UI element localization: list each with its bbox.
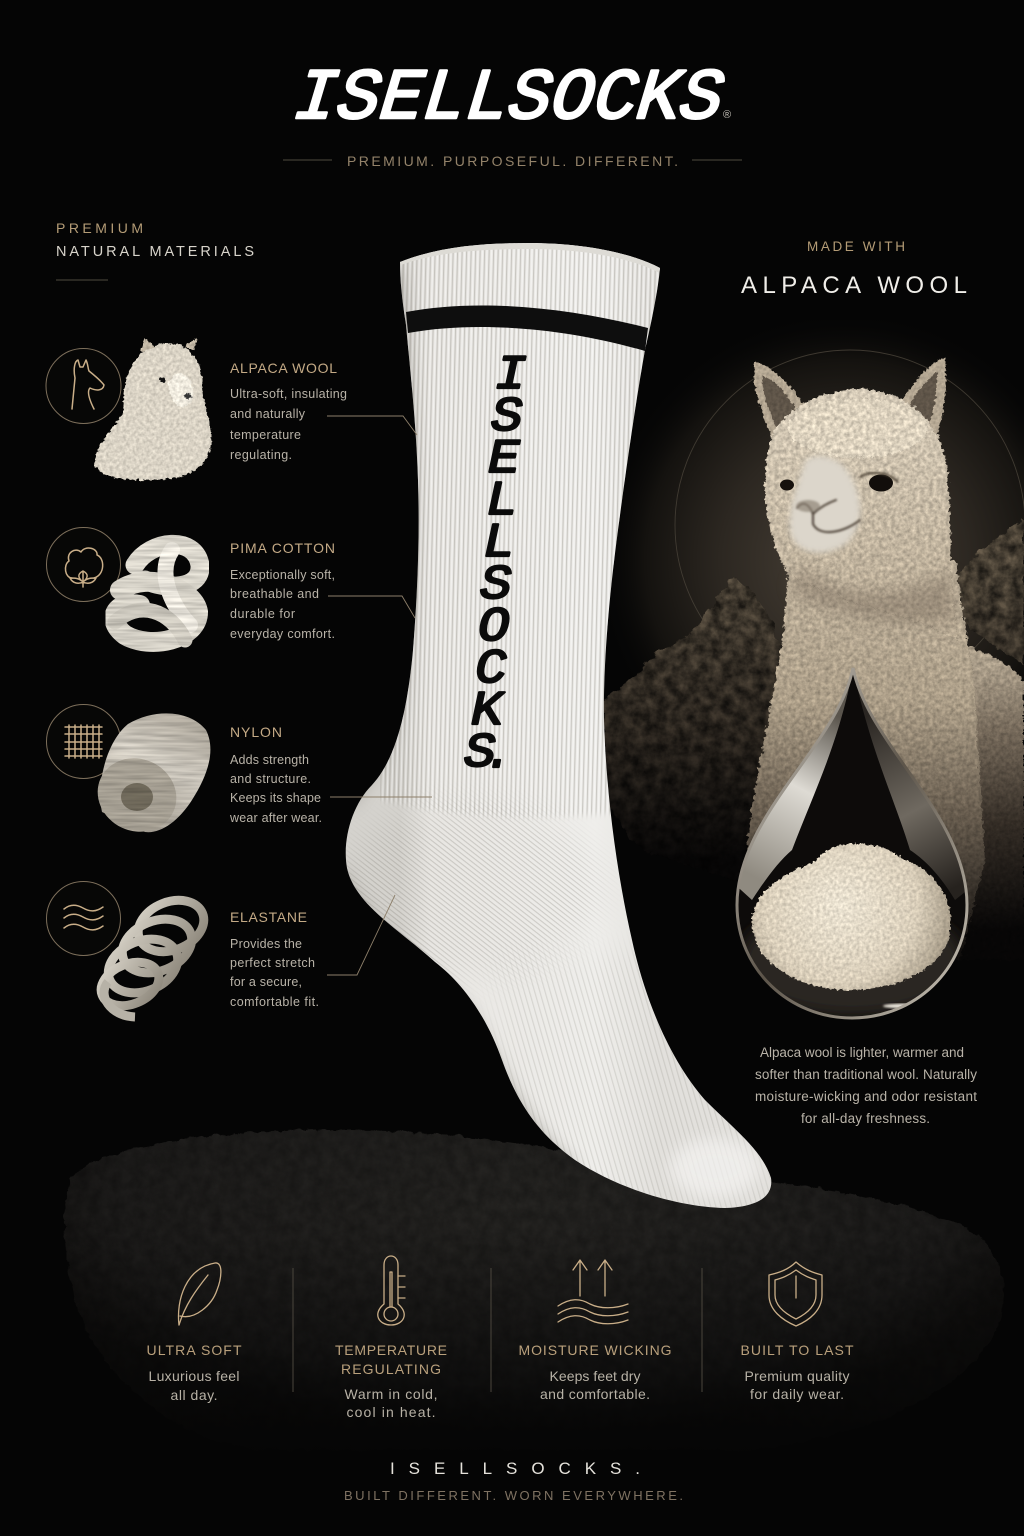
text: ultra soft [148, 1368, 240, 1403]
heading: made with alpaca wool: MADE WITH [807, 239, 905, 254]
backdrop glow [600, 320, 1024, 840]
heading: ultra soft: ULTRA SOFT [146, 1342, 242, 1358]
text: temperature regulating: Warm in cold, [344, 1386, 438, 1402]
droplet left highlight [740, 686, 850, 900]
sock cuff seam [400, 246, 660, 270]
text: moisture wicking: Keeps feet dry [550, 1368, 640, 1384]
alpaca muzzle [790, 456, 860, 552]
footer: ISELLSOCKS. [390, 1459, 640, 1478]
alpaca wool description: moisture-wicking and odor resistant [755, 1089, 977, 1104]
heading: built to last: BUILT TO LAST [740, 1342, 854, 1358]
text: moisture wicking: and comfortable. [540, 1386, 650, 1402]
alpaca wool description: softer than traditional wool. Naturally [755, 1067, 977, 1082]
heading: temperature regulating [335, 1342, 447, 1377]
description: elastane: perfect stretch [230, 956, 315, 970]
panel: alpaca portrait with mountains [600, 320, 1024, 960]
text: ultra soft: Luxurious feel [148, 1368, 240, 1384]
text: ultra soft: all day. [170, 1387, 218, 1403]
benefit dividers [293, 1268, 702, 1392]
sock vertical logo [464, 349, 527, 782]
fleece inside droplet [752, 843, 951, 990]
tagline: PREMIUM. PURPOSEFUL. DIFFERENT. [347, 153, 678, 169]
description: nylon: Keeps its shape [230, 791, 321, 805]
connector [327, 895, 395, 975]
droplet lower glass [744, 928, 960, 1016]
alpaca wool description [755, 1045, 977, 1126]
description: pima cotton: durable for [230, 607, 295, 621]
description: alpaca wool: Ultra-soft, insulating [230, 387, 347, 401]
label: elastane: ELASTANE [230, 909, 307, 925]
icon: cotton circle [46, 528, 120, 602]
text: temperature regulating [344, 1386, 438, 1420]
connector [327, 416, 417, 435]
alpaca forehead wool [788, 398, 928, 458]
material: pima cotton [46, 528, 415, 642]
icon: arrows and waves [558, 1260, 628, 1324]
alpaca wool description: for all-day freshness. [801, 1111, 930, 1126]
sock vertical logo: . [484, 728, 513, 782]
sock rib texture [380, 240, 680, 830]
text: built to last [744, 1368, 850, 1402]
alpaca neck shadow [790, 565, 955, 623]
text: built to last: Premium quality [744, 1368, 850, 1384]
connector [328, 596, 415, 618]
benefit: temperature regulating [335, 1256, 447, 1420]
droplet bottom shine [882, 1003, 906, 1009]
material: nylon [46, 704, 432, 845]
benefit: moisture wicking [518, 1260, 672, 1402]
alpaca eyes [780, 473, 898, 492]
text: built to last: for daily wear. [750, 1386, 844, 1402]
heading: moisture wicking: MOISTURE WICKING [518, 1342, 672, 1358]
icon: alpaca circle [46, 348, 121, 424]
description: elastane: Provides the [230, 937, 302, 951]
description: nylon: and structure. [230, 772, 311, 786]
sock black stripe [406, 305, 648, 351]
footer [344, 1459, 683, 1503]
droplet right highlight [858, 690, 965, 900]
label: alpaca wool: ALPACA WOOL [230, 360, 337, 376]
description: pima cotton: breathable and [230, 587, 319, 601]
description: pima cotton: everyday comfort. [230, 627, 335, 641]
icon: mesh circle [46, 704, 120, 778]
icon: feather [178, 1263, 221, 1325]
sock vertical logo: O [478, 601, 510, 655]
benefit: ultra soft [146, 1263, 242, 1403]
title: ® [723, 109, 731, 121]
stone pedestal [40, 1130, 1020, 1460]
thumbnail: nylon spool [86, 713, 210, 845]
heading: made with alpaca wool [741, 239, 967, 299]
description: elastane: comfortable fit. [230, 995, 319, 1009]
sock vertical logo: L [486, 475, 518, 529]
heading: temperature regulating: TEMPERATURE [335, 1342, 447, 1358]
description: alpaca wool: temperature [230, 428, 301, 442]
alpaca ears [754, 357, 946, 445]
sock shading [347, 868, 580, 1163]
label: pima cotton: PIMA COTTON [230, 540, 335, 556]
description: nylon [229, 753, 322, 825]
sock vertical logo: S [480, 559, 512, 613]
icon: shield [769, 1262, 822, 1326]
heading: premium natural materials: NATURAL MATERIALS [56, 244, 254, 260]
sock vertical logo: S [491, 391, 523, 445]
label: nylon: NYLON [230, 724, 282, 740]
mountains [605, 520, 1024, 880]
description: alpaca wool: and naturally [230, 407, 306, 421]
description: pima cotton: Exceptionally soft, [230, 568, 335, 582]
alpaca nose and mouth [796, 500, 860, 532]
sock vertical logo: L [483, 517, 515, 571]
description: alpaca wool: regulating. [230, 448, 292, 462]
description: alpaca wool [230, 387, 347, 462]
sock vertical logo: I [495, 349, 527, 403]
icon: thermometer [378, 1256, 405, 1325]
title: ISELLSOCKS [291, 58, 727, 140]
material: alpaca wool [46, 338, 417, 480]
sock vertical logo: C [475, 643, 507, 697]
footer: BUILT DIFFERENT. WORN EVERYWHERE. [344, 1488, 683, 1503]
sock vertical logo: E [488, 433, 520, 487]
halo arc [675, 350, 1024, 700]
sock vertical logo: K [471, 685, 506, 739]
description: nylon: Adds strength [230, 753, 309, 767]
thumbnail: cotton knot [114, 544, 200, 642]
heading: premium natural materials [56, 220, 254, 280]
heading: premium natural materials: PREMIUM [56, 220, 143, 236]
icon: waves circle [46, 882, 120, 956]
alpaca head [765, 389, 958, 640]
connector [330, 796, 432, 798]
heading: made with alpaca wool: ALPACA WOOL [741, 272, 967, 299]
sock [346, 243, 772, 1208]
material: elastane [46, 882, 395, 1017]
sock vertical logo: S [464, 727, 496, 781]
thumbnail: alpaca [94, 338, 212, 480]
alpaca body [880, 640, 1024, 960]
description: nylon: wear after wear. [229, 811, 322, 825]
description: pima cotton [230, 568, 335, 641]
benefit: built to last [740, 1262, 854, 1402]
text: moisture wicking [540, 1368, 650, 1402]
heading: temperature regulating: REGULATING [341, 1361, 441, 1377]
thumbnail: elastane coil [95, 891, 212, 1017]
droplet with alpaca fleece [730, 668, 980, 1018]
description: elastane [230, 937, 319, 1009]
alpaca neck [746, 545, 985, 960]
text: temperature regulating: cool in heat. [346, 1404, 436, 1420]
alpaca wool description: Alpaca wool is lighter, warmer and [760, 1045, 964, 1060]
description: elastane: for a secure, [230, 975, 302, 989]
